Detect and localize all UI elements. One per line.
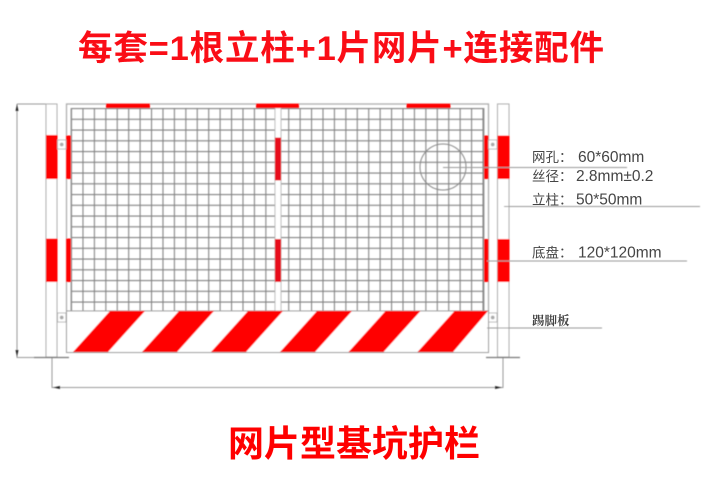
mesh detail circle [420, 144, 466, 190]
label: kick plate: 踢脚板 [532, 313, 570, 328]
fence diagram [16, 104, 700, 389]
dimension: height [16, 104, 46, 358]
label: base plate: 120*120mm [578, 244, 662, 262]
right post [486, 104, 520, 358]
label: mesh size: 60*60mm [578, 149, 644, 166]
label: wire diameter: 丝径： [532, 169, 572, 184]
leader lines [443, 168, 700, 328]
label: wire diameter: 2.8mm±0.2 [576, 168, 653, 185]
label: mesh size: 网孔： [532, 150, 572, 165]
frame red bands [66, 136, 488, 282]
label: base plate: 底盘： [532, 246, 572, 260]
mesh panel [66, 104, 488, 311]
connector brackets [58, 140, 497, 322]
label: post: 立柱： [532, 192, 572, 208]
top red bars [106, 104, 450, 108]
title: 每套=1根立柱+1片网片+连接配件 [78, 30, 604, 68]
centre post [275, 108, 281, 311]
dimension: width [52, 358, 503, 389]
label: post: 50*50mm [576, 192, 642, 208]
left post [34, 104, 69, 358]
kick plate [66, 311, 488, 352]
spec labels [532, 149, 662, 328]
bottom title: 网片型基坑护栏 [228, 423, 480, 464]
